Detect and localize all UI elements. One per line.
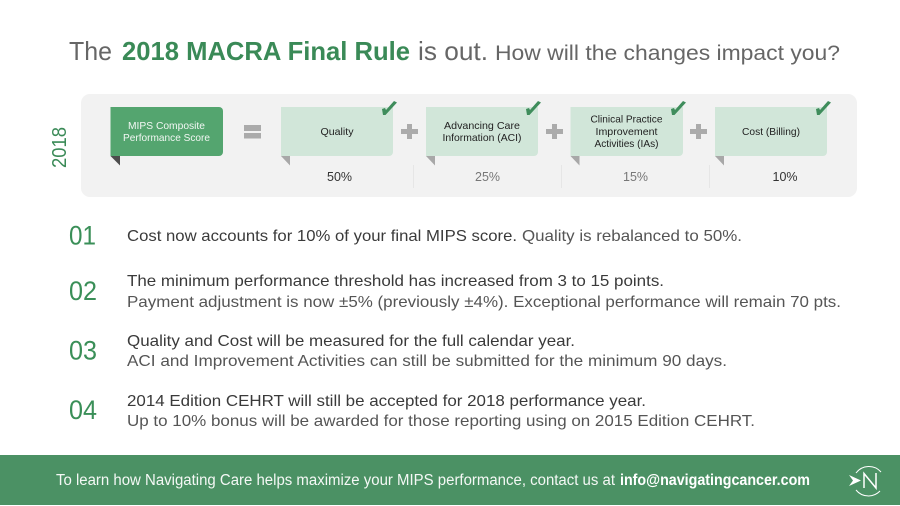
item 02: The minimum performance threshold has increased from 3 to 15 points. [127,273,664,290]
logo: Navigating Cancer [849,466,881,496]
item 04: Up to 10% bonus will be awarded for those reporting using on 2015 Edition CEHRT. [127,413,755,430]
year label: 2018 [49,127,71,168]
icon: plus [690,124,707,139]
item 03: Quality and Cost will be measured for the full calendar year. [127,333,575,350]
box: cost [715,101,831,166]
box: MIPS composite score [110,107,223,166]
title: is out. [418,36,488,66]
percentages: 15% [623,169,648,184]
icon: plus [546,124,563,139]
box: MIPS composite score: MIPS Composite [128,120,205,132]
title: How will the changes impact you? [495,42,840,65]
percentages: 25% [475,169,500,184]
item 04 [69,393,755,430]
percentages: 10% [772,169,798,184]
item 03: 03 [69,336,97,366]
item 02: Payment adjustment is now ±5% (previously ±4%). Exceptional performance will remain 70 pts. [127,294,841,311]
box: quality: Quality [320,126,354,138]
box: MIPS composite score: Performance Score [123,132,210,144]
percentages: 50% [327,169,352,184]
box: advancing care information: Advancing Care [444,120,520,132]
box: clinical practice improvement activities: Activities (IAs) [594,138,658,150]
icon: check [382,101,397,115]
box: clinical practice improvement activities [570,101,686,166]
icon: equals [244,125,261,138]
footer text: info@navigatingcancer.com [620,472,810,489]
percentages [327,169,798,184]
item 01 [69,220,742,250]
item 03: ACI and Improvement Activities can still be submitted for the minimum 90 days. [127,353,727,370]
item 02 [69,273,841,311]
box: advancing care information [426,101,541,166]
panel: MIPS score formula [81,94,857,197]
item 04: 04 [69,395,97,425]
box: advancing care information: Information (ACI) [442,132,522,144]
icon: plus [401,124,418,139]
title: The [69,36,112,66]
box: cost: Cost (Billing) [742,126,800,138]
box: clinical practice improvement activities: Improvement [596,126,658,138]
icon: check [526,101,541,115]
item 01: 01 [69,220,96,250]
box: clinical practice improvement activities: Clinical Practice [590,114,663,126]
item 01: Cost now accounts for 10% of your final MIPS score. [127,228,517,245]
footer text: To learn how Navigating Care helps maximize your MIPS performance, contact us at [56,472,616,489]
box: quality [281,101,397,166]
item 04: 2014 Edition CEHRT will still be accepted for 2018 performance year. [127,393,646,410]
icon: check [816,101,831,115]
item 02: 02 [69,276,97,306]
title: 2018 MACRA Final Rule [122,36,410,66]
item 01: Quality is rebalanced to 50%. [522,228,742,245]
footer banner [0,455,900,505]
icon: check [671,101,686,115]
title [69,36,840,66]
item 03 [69,333,727,370]
